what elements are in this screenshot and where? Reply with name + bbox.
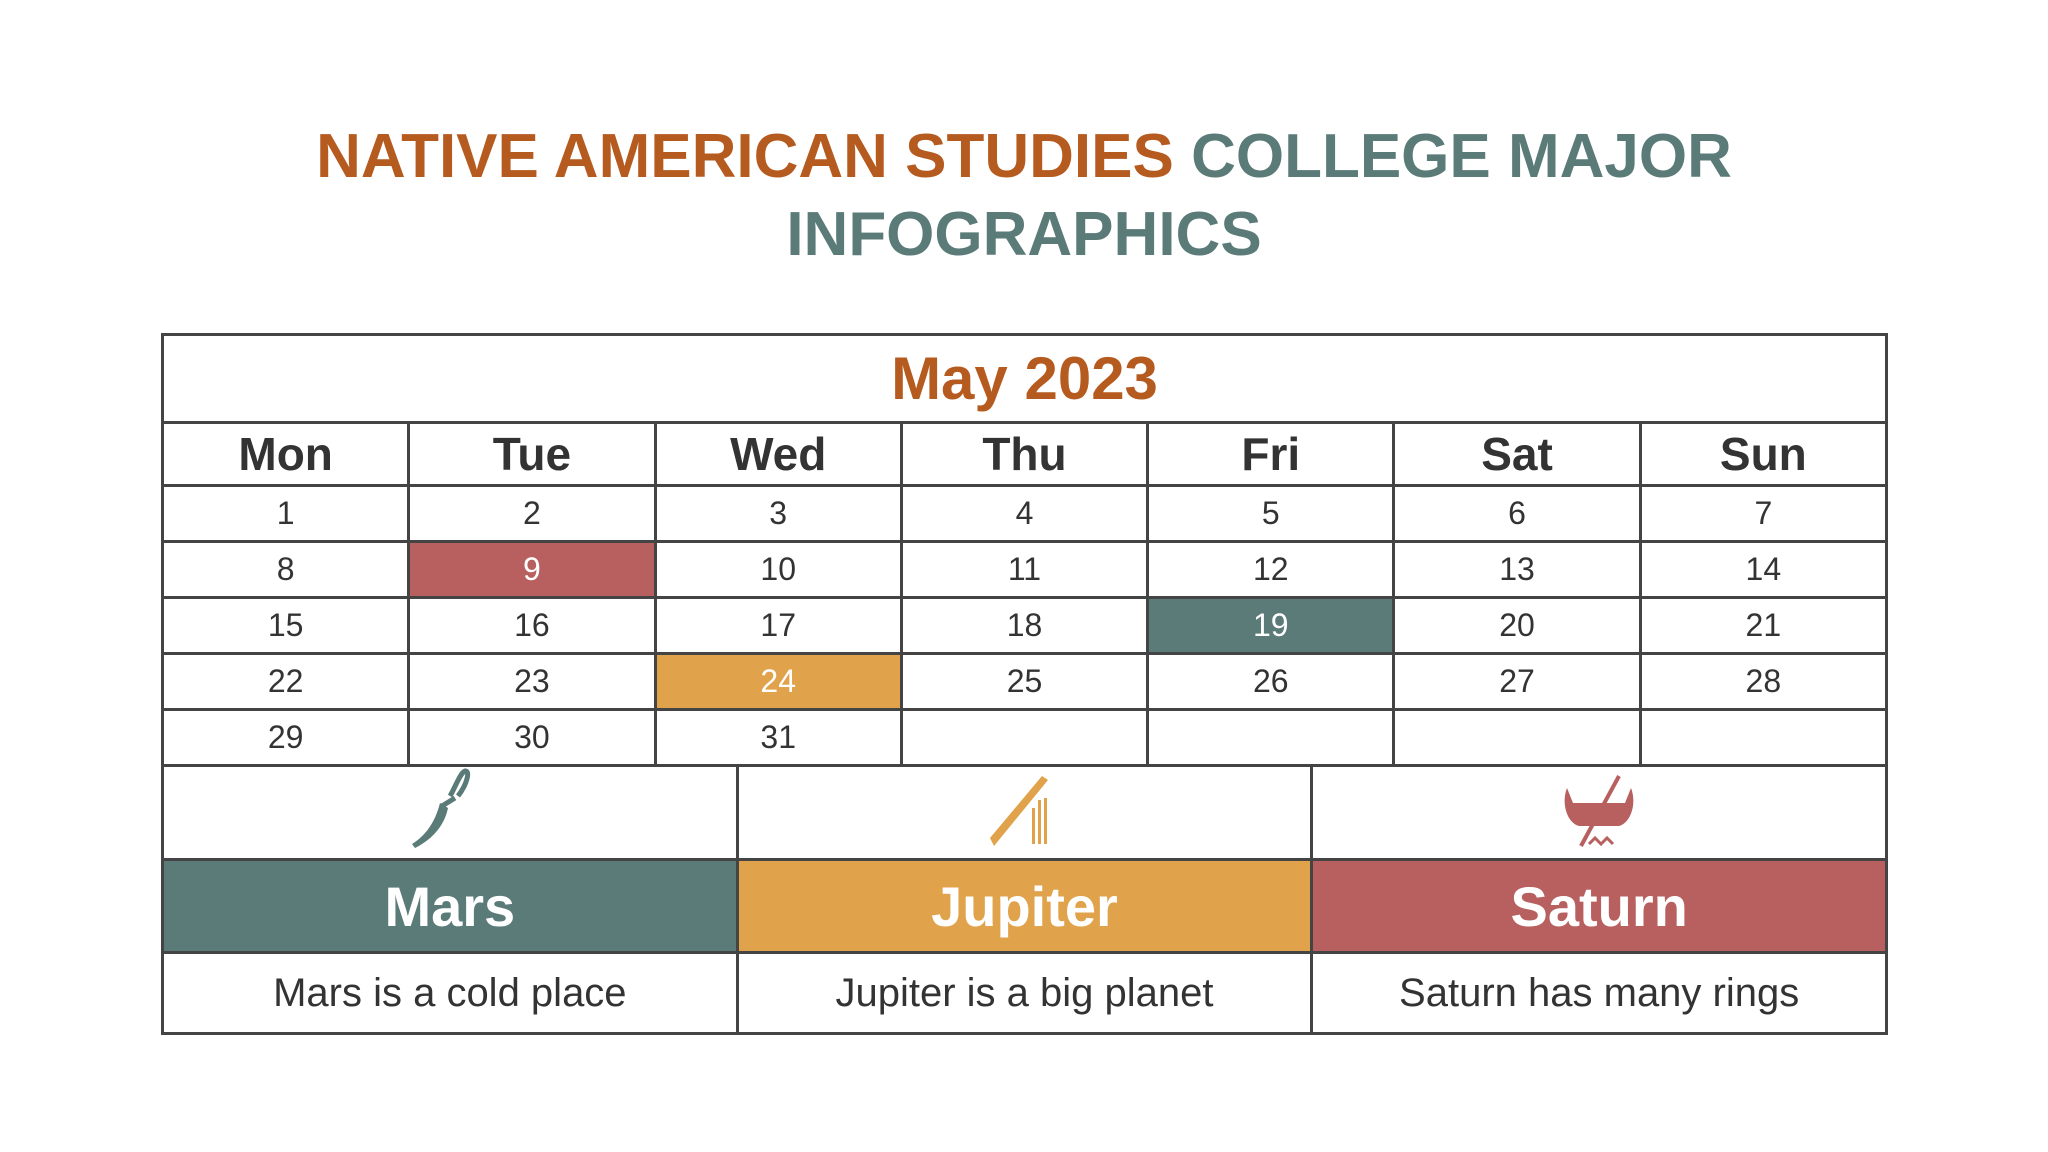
calendar table: 18 (1007, 607, 1042, 643)
calendar table: Sun (1720, 428, 1807, 480)
calendar table: 4 (1016, 495, 1033, 531)
calendar table: Wed (730, 428, 826, 480)
legend table (161, 767, 1888, 1035)
title: NATIVE AMERICAN STUDIES COLLEGE MAJOR (316, 122, 1732, 191)
legend table: Saturn (1510, 874, 1688, 938)
calendar table: 25 (1007, 663, 1042, 699)
calendar table: 30 (514, 719, 550, 755)
calendar table: 8 (277, 551, 295, 587)
calendar table: 2 (523, 495, 541, 531)
calendar table: 27 (1499, 663, 1535, 699)
calendar table: 20 (1499, 607, 1535, 643)
calendar table: 15 (268, 607, 303, 643)
calendar table: Thu (982, 428, 1067, 480)
calendar table: 16 (514, 607, 550, 643)
calendar table: 24 (760, 663, 796, 699)
calendar table: 9 (523, 551, 541, 587)
icon: flute (990, 776, 1048, 846)
calendar table: 5 (1262, 495, 1280, 531)
calendar table: 3 (769, 495, 787, 531)
calendar table: 1 (277, 495, 295, 531)
legend table: Mars (384, 874, 515, 938)
icon: knife (412, 768, 470, 848)
calendar table: 26 (1253, 663, 1289, 699)
calendar table (161, 333, 1888, 764)
calendar table: 21 (1746, 607, 1781, 643)
calendar table: 11 (1008, 551, 1041, 587)
calendar table: Mon (238, 428, 333, 480)
calendar table: 28 (1746, 663, 1781, 699)
calendar table: Tue (493, 428, 571, 480)
calendar table: 12 (1253, 551, 1289, 587)
legend table: Jupiter is a big planet (835, 970, 1213, 1014)
title (316, 122, 1732, 269)
calendar table: 19 (1253, 607, 1289, 643)
calendar table: 10 (760, 551, 796, 587)
calendar table: Fri (1241, 428, 1300, 480)
calendar table: 7 (1754, 495, 1772, 531)
calendar table: Sat (1481, 428, 1553, 480)
calendar table: 6 (1508, 495, 1526, 531)
calendar table: 23 (514, 663, 550, 699)
icon: canoe (1564, 775, 1634, 847)
legend table: Jupiter (931, 874, 1118, 938)
calendar table: 31 (760, 719, 796, 755)
calendar table: 29 (268, 719, 303, 755)
title: INFOGRAPHICS (786, 200, 1262, 269)
legend table: Mars is a cold place (273, 970, 627, 1014)
calendar table: 22 (268, 663, 303, 699)
legend table: Saturn has many rings (1399, 970, 1799, 1014)
calendar table: 17 (760, 607, 796, 643)
calendar table: May 2023 (891, 345, 1158, 412)
calendar table: 14 (1746, 551, 1781, 587)
calendar table: 13 (1499, 551, 1535, 587)
